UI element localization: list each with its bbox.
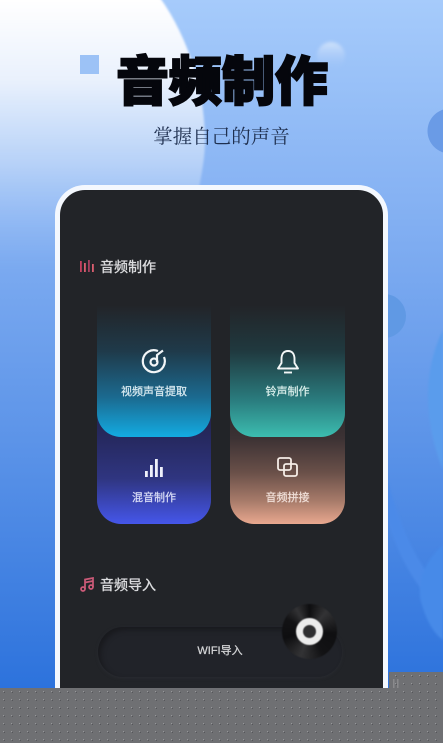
icon: disc with needle [142, 349, 166, 374]
icon: bell [277, 350, 299, 374]
card: video audio extraction [97, 305, 211, 437]
subtitle: 掌握自己的声音 [153, 127, 290, 148]
decorative square [80, 55, 99, 74]
label: 铃声制作 [266, 386, 310, 398]
icon: equalizer bars [80, 260, 94, 272]
label: 音频拼接 [266, 492, 310, 504]
button label: WIFI导入 [197, 645, 243, 657]
heading text: 音频制作 [100, 259, 156, 275]
icon: bars [145, 459, 163, 477]
heading text: 音频导入 [100, 577, 156, 593]
phone mockup [55, 185, 388, 688]
icon: overlapping squares [277, 457, 298, 477]
section heading: audio production [80, 259, 156, 275]
icon: vinyl record [282, 604, 337, 659]
icon: music note [80, 577, 94, 592]
button: WIFI import [98, 627, 342, 677]
card: mixing [97, 410, 211, 524]
record label [296, 618, 323, 645]
grey bottom band [0, 672, 443, 743]
card: audio splicing [230, 410, 345, 524]
section heading: audio import [80, 577, 156, 593]
title: 音频制作 [116, 53, 328, 112]
card: ringtone production [230, 305, 345, 437]
label: 混音制作 [132, 492, 176, 504]
label: 视频声音提取 [121, 386, 187, 398]
